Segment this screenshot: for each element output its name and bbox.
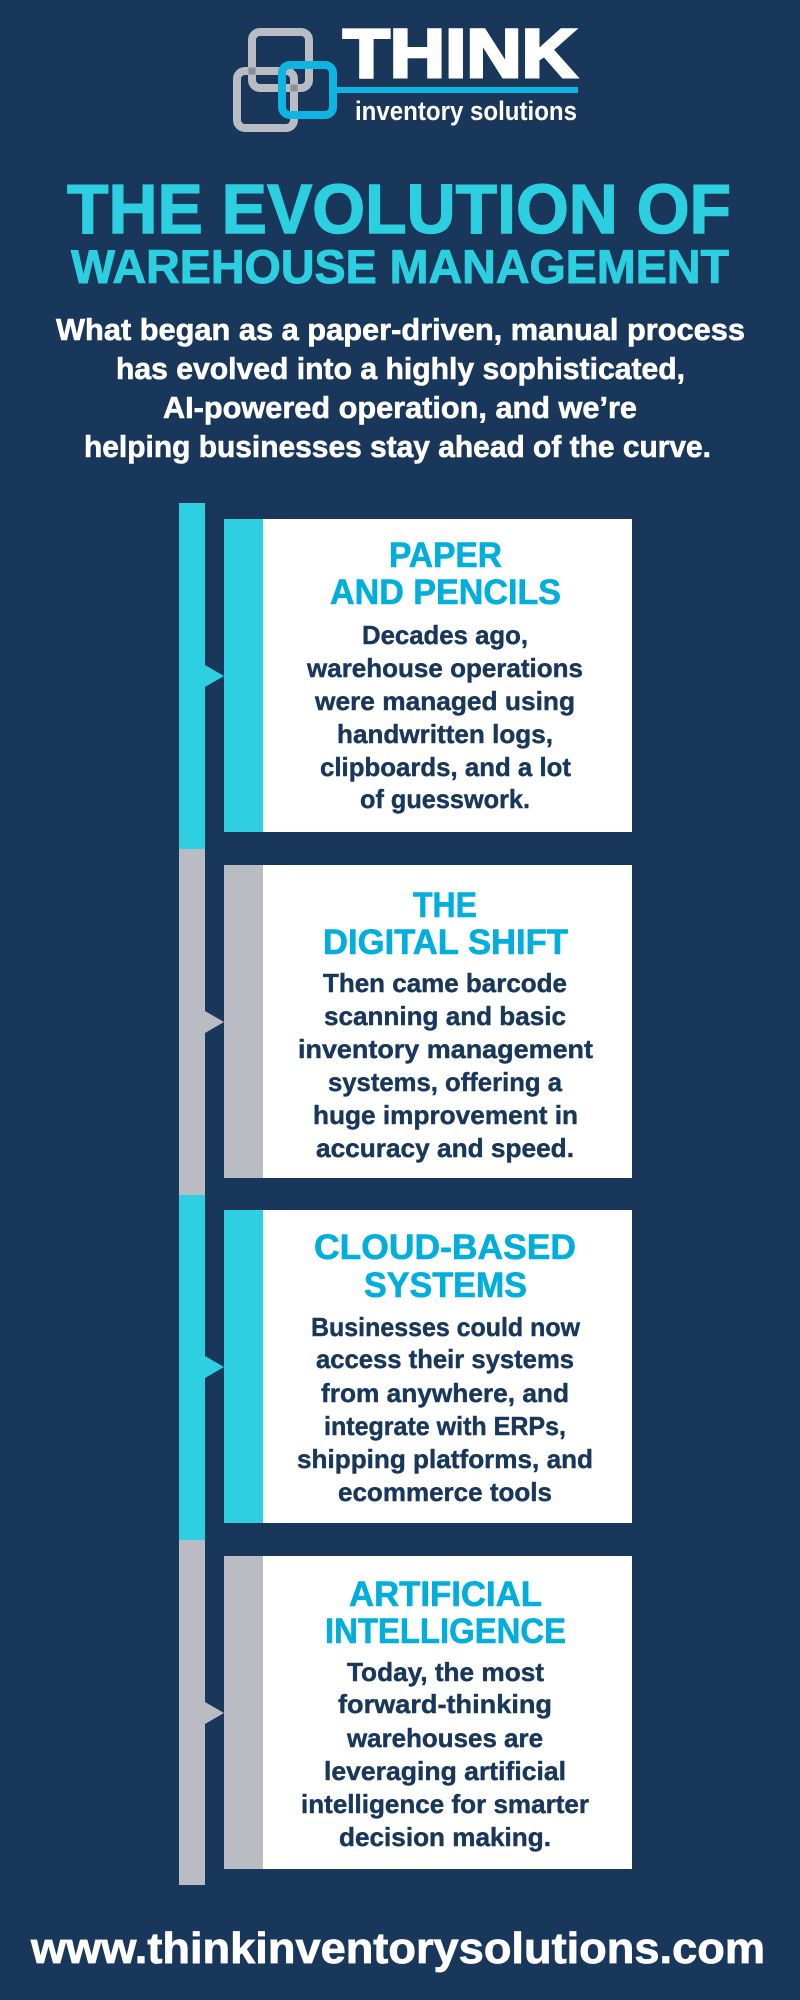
- website url: www.thinkinventorysolutions.com: [30, 1924, 765, 1973]
- card background: [224, 865, 632, 1178]
- body text: inventory management: [298, 1034, 593, 1064]
- heading: [323, 886, 568, 962]
- body text: handwritten logs,: [337, 719, 553, 749]
- body text: clipboards, and a lot: [320, 752, 571, 782]
- accent bar: [224, 865, 263, 1178]
- accent bar: [224, 1210, 263, 1523]
- heading: AND PENCILS: [330, 573, 561, 612]
- heading: [330, 536, 561, 612]
- intro text: AI-powered operation, and we’re: [163, 391, 637, 425]
- intro text: What began as a paper-driven, manual process: [56, 313, 745, 347]
- panel: cloud-based systems: [205, 1210, 632, 1523]
- heading: SYSTEMS: [364, 1266, 527, 1305]
- heading: ARTIFICIAL: [349, 1575, 542, 1614]
- timeline rail: [179, 503, 205, 1885]
- body text: leveraging artificial: [324, 1756, 566, 1786]
- accent bar: [224, 519, 263, 832]
- intro text: [56, 313, 745, 464]
- card background: [224, 1556, 632, 1869]
- panel: the digital shift: [205, 865, 632, 1178]
- body text: ecommerce tools: [338, 1477, 552, 1507]
- card background: [224, 1210, 632, 1523]
- logo: THINK: [343, 15, 577, 92]
- body text: access their systems: [316, 1344, 574, 1374]
- body text: Decades ago,: [362, 620, 528, 650]
- arrow: [205, 1702, 224, 1724]
- intro text: has evolved into a highly sophisticated,: [116, 352, 685, 386]
- arrow: [205, 1356, 224, 1378]
- body text: were managed using: [314, 686, 575, 716]
- body text: integrate with ERPs,: [324, 1411, 566, 1441]
- heading: CLOUD-BASED: [314, 1228, 576, 1267]
- logo: [237, 15, 578, 128]
- title: WAREHOUSE MANAGEMENT: [71, 241, 729, 294]
- heading: THE: [413, 886, 477, 925]
- body text: warehouses are: [346, 1723, 543, 1753]
- title: THE EVOLUTION OF: [67, 170, 731, 248]
- body text: [298, 968, 593, 1163]
- title: [67, 170, 731, 294]
- body text: from anywhere, and: [321, 1378, 569, 1408]
- heading: INTELLIGENCE: [325, 1612, 566, 1651]
- heading: [325, 1575, 566, 1651]
- body text: accuracy and speed.: [316, 1133, 574, 1163]
- body text: [306, 620, 583, 814]
- accent bar: [224, 1556, 263, 1869]
- panel: paper and pencils: [205, 519, 632, 832]
- body text: forward-thinking: [338, 1689, 552, 1719]
- heading: [314, 1228, 576, 1305]
- heading: DIGITAL SHIFT: [323, 923, 568, 962]
- body text: of guesswork.: [360, 784, 530, 814]
- body text: scanning and basic: [324, 1001, 566, 1031]
- body text: Then came barcode: [323, 968, 567, 998]
- body text: [297, 1312, 593, 1507]
- body text: [301, 1657, 589, 1852]
- body text: decision making.: [339, 1822, 551, 1852]
- intro text: helping businesses stay ahead of the curve.: [84, 430, 711, 464]
- card background: [224, 519, 632, 832]
- body text: warehouse operations: [306, 653, 583, 683]
- logo: inventory solutions: [355, 96, 577, 126]
- panel: artificial intelligence: [205, 1556, 632, 1869]
- body text: Today, the most: [347, 1657, 544, 1687]
- body text: shipping platforms, and: [297, 1444, 593, 1474]
- heading: PAPER: [389, 536, 502, 575]
- body text: Businesses could now: [311, 1312, 581, 1342]
- body text: systems, offering a: [328, 1067, 563, 1097]
- body text: huge improvement in: [313, 1100, 578, 1130]
- body text: intelligence for smarter: [301, 1789, 589, 1819]
- arrow: [205, 665, 224, 687]
- arrow: [205, 1011, 224, 1033]
